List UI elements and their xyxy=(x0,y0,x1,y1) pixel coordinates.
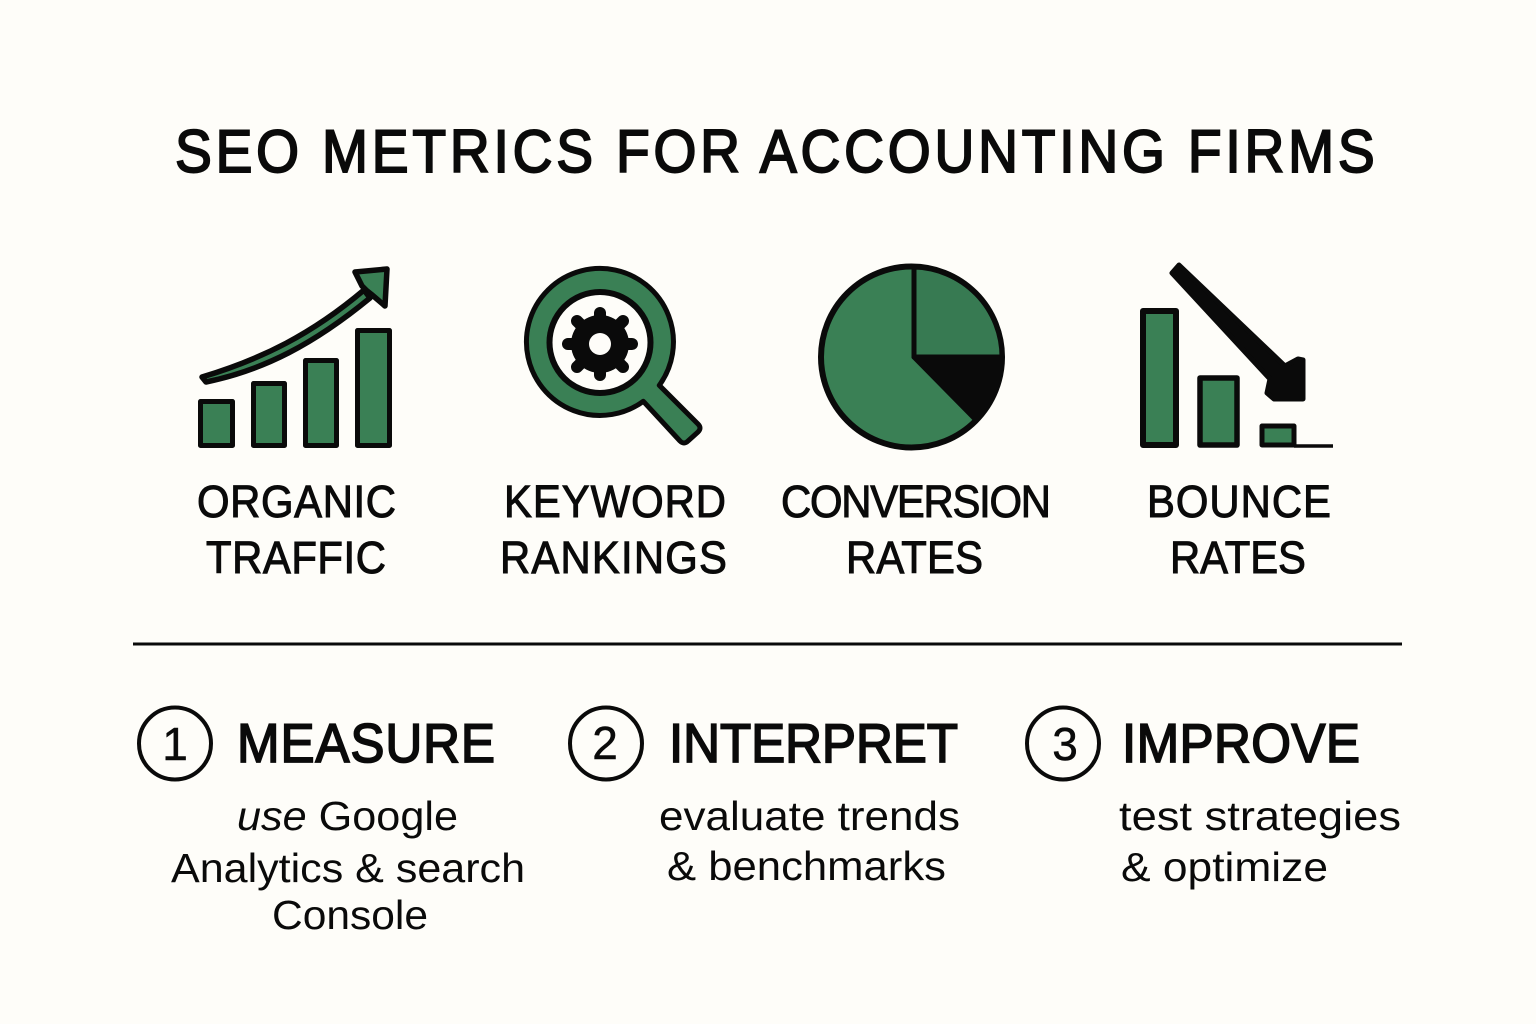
metric label: keyword rankings: KEYWORD xyxy=(504,478,726,527)
step 2: interpret: INTERPRET xyxy=(669,713,958,774)
step 2: interpret xyxy=(570,708,960,889)
metric label: organic traffic xyxy=(197,478,396,583)
metric label: bounce rates: RATES xyxy=(1170,534,1306,583)
step 3: improve: & optimize xyxy=(1121,844,1328,890)
metric label: conversion rates xyxy=(781,478,1051,583)
step 1: measure: MEASURE xyxy=(237,713,495,774)
step 2: interpret: 2 xyxy=(592,717,618,769)
step 2: interpret: & benchmarks xyxy=(667,843,946,889)
metric label: organic traffic: TRAFFIC xyxy=(206,534,386,583)
step 1: measure: 1 xyxy=(162,718,188,770)
step 1: measure xyxy=(139,708,525,938)
step 1: measure: Console xyxy=(272,892,428,938)
step 1: measure: Analytics & search xyxy=(171,845,525,891)
icon: bounce rates falling bars and arrow xyxy=(1143,265,1333,446)
step 1: measure: use Google xyxy=(237,793,458,839)
metric label: conversion rates: CONVERSION xyxy=(781,478,1051,527)
step 3: improve: 3 xyxy=(1052,718,1078,770)
metric label: keyword rankings xyxy=(500,478,727,583)
icon: conversion rates pie chart xyxy=(821,266,1002,448)
step 3: improve: test strategies xyxy=(1119,793,1401,839)
icon: organic traffic growth bars and arrow xyxy=(200,269,390,446)
metric label: organic traffic: ORGANIC xyxy=(197,478,396,527)
metric label: keyword rankings: RANKINGS xyxy=(500,534,727,583)
metric label: bounce rates xyxy=(1147,478,1331,583)
icon: keyword rankings magnifier with gear xyxy=(526,268,700,443)
metric label: conversion rates: RATES xyxy=(846,534,983,583)
title: SEO METRICS FOR ACCOUNTING FIRMS xyxy=(175,119,1375,186)
metric label: bounce rates: BOUNCE xyxy=(1147,478,1331,527)
step 3: improve xyxy=(1027,708,1401,890)
step 3: improve: IMPROVE xyxy=(1122,713,1360,774)
step 2: interpret: evaluate trends xyxy=(659,793,960,839)
